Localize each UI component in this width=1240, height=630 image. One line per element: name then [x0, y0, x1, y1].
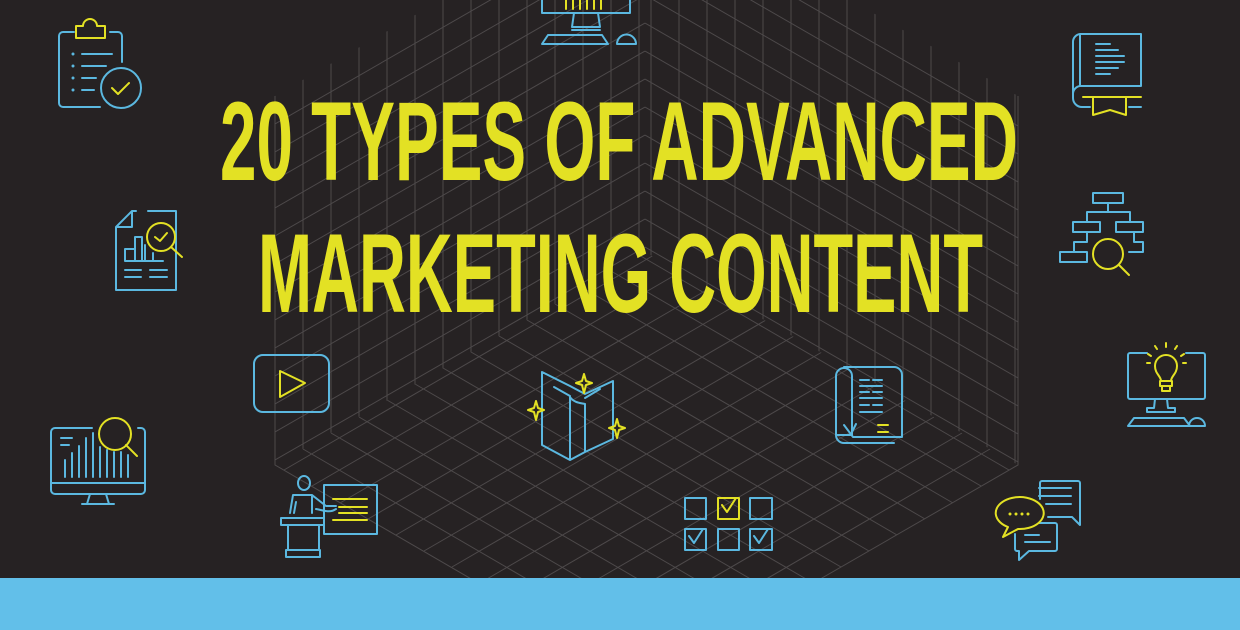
- icon: presenter: [281, 476, 377, 557]
- icon: clipboard check: [59, 19, 141, 108]
- icon: lightbulb monitor: [1128, 343, 1205, 426]
- icon: top monitor: [542, 0, 636, 44]
- icon: org chart magnifier: [1060, 193, 1143, 275]
- icon: monitor analytics: [51, 418, 145, 504]
- icon: open book with sparkles: [528, 372, 625, 460]
- icon: video play: [254, 355, 329, 412]
- icon: book with bookmark: [1073, 34, 1141, 115]
- icon: report magnifier: [116, 211, 182, 290]
- icon: checkboxes: [685, 498, 772, 550]
- icon: scroll document: [836, 367, 902, 443]
- icon: chat bubbles: [996, 481, 1080, 560]
- bottom blue band: [0, 578, 1240, 630]
